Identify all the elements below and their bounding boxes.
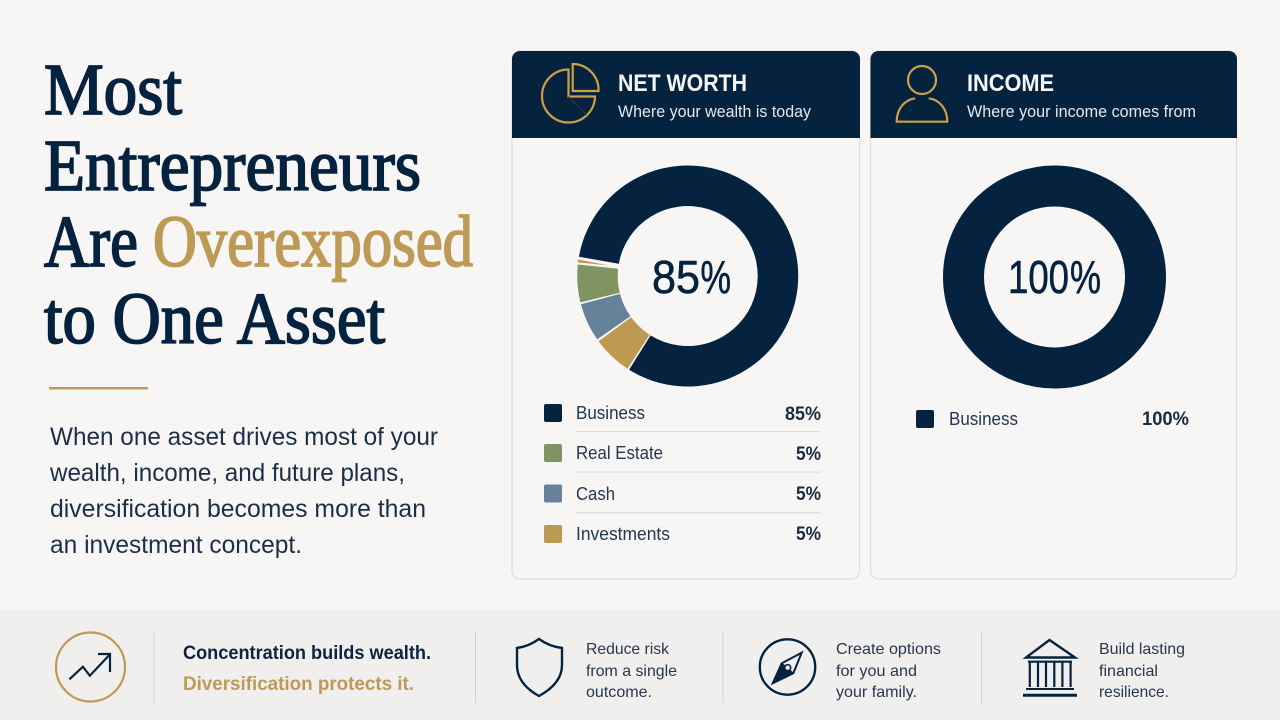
icon: person — [897, 66, 947, 122]
intro paragraph: When one asset drives most of your — [50, 423, 438, 451]
legend: income — [916, 409, 1189, 430]
legend: net worth: Investments — [576, 524, 670, 544]
income subheading: Where your income comes from — [967, 102, 1196, 121]
donut chart: net worth: 85 — [652, 251, 700, 303]
intro paragraph: diversification becomes more than — [50, 495, 426, 523]
title: Are — [44, 201, 138, 282]
icon: growth arrow — [56, 632, 125, 702]
benefit: create options: your family. — [836, 684, 917, 701]
benefit: reduce risk — [586, 641, 677, 701]
intro paragraph: an investment concept. — [50, 531, 302, 559]
title: to One Asset — [44, 278, 385, 359]
income heading: INCOME — [967, 70, 1054, 97]
net worth header — [512, 51, 860, 138]
title — [44, 49, 473, 359]
benefit: build resilience: resilience. — [1099, 684, 1169, 701]
title: Most — [44, 49, 182, 130]
panel: footer band — [0, 610, 1280, 720]
benefit: create options — [836, 641, 941, 701]
donut chart: income: 100 — [1008, 251, 1069, 303]
legend: net worth: Business — [576, 403, 645, 423]
donut chart: net worth — [577, 166, 798, 387]
icon: pie chart — [542, 64, 599, 123]
title: Overexposed — [153, 201, 473, 282]
footer statement: Diversification protects it. — [183, 674, 414, 695]
title: Entrepreneurs — [44, 125, 421, 206]
icon: bank — [1023, 640, 1077, 695]
benefit: create options: for you and — [836, 663, 917, 680]
icon: compass — [760, 639, 815, 695]
net worth subheading: Where your wealth is today — [618, 102, 811, 121]
benefit: build resilience — [1099, 641, 1185, 701]
benefit: reduce risk: Reduce risk — [586, 641, 670, 658]
benefit: build resilience: financial — [1099, 663, 1158, 680]
panel: net worth — [512, 51, 860, 579]
donut chart: net worth: % — [700, 251, 731, 303]
legend: net worth: 5% — [796, 484, 821, 505]
benefit: reduce risk: outcome. — [586, 684, 652, 701]
panel: income — [870, 51, 1237, 579]
benefit: create options: Create options — [836, 641, 941, 658]
donut chart: income: % — [1070, 251, 1101, 303]
income header — [870, 51, 1237, 138]
legend: net worth: 85% — [785, 404, 821, 425]
icon: shield — [517, 639, 562, 696]
legend: net worth — [544, 403, 821, 545]
legend: income: Business — [949, 409, 1018, 429]
benefit: reduce risk: from a single — [586, 663, 677, 680]
benefit: build resilience: Build lasting — [1099, 641, 1185, 658]
legend: net worth: Cash — [576, 484, 615, 504]
footer statement — [183, 643, 431, 695]
footer statement: Concentration builds wealth. — [183, 643, 431, 664]
legend: net worth: Real Estate — [576, 443, 663, 463]
legend: net worth: 5% — [796, 444, 821, 465]
net worth heading: NET WORTH — [618, 70, 747, 97]
intro paragraph: wealth, income, and future plans, — [49, 459, 405, 487]
intro paragraph — [49, 423, 438, 559]
legend: net worth: 5% — [796, 524, 821, 545]
donut chart: income — [964, 186, 1146, 368]
legend: income: 100% — [1142, 409, 1189, 430]
